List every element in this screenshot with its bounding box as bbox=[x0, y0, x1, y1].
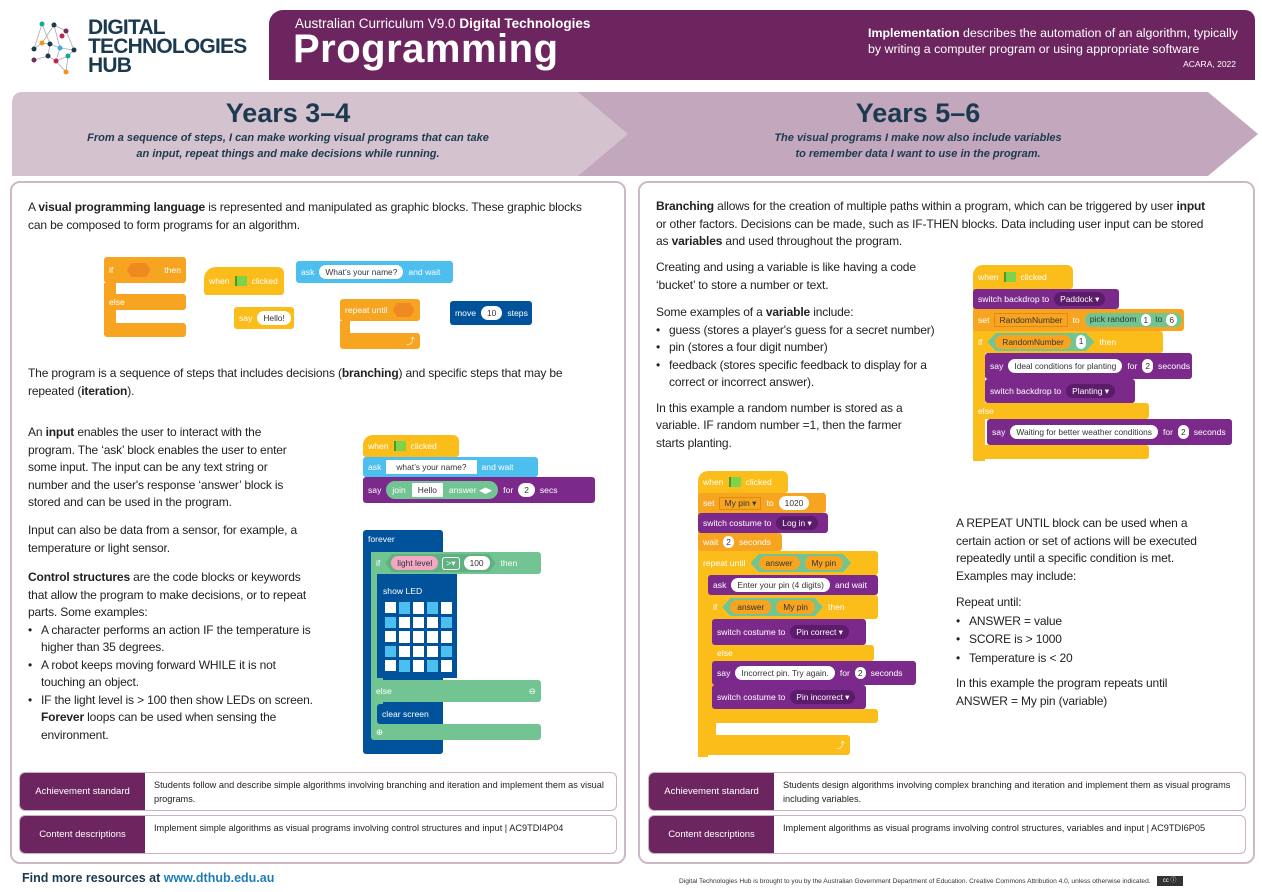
input program blocks: join answer ◀▶ bbox=[392, 484, 492, 495]
definition bbox=[868, 26, 1238, 69]
example blocks: Hello! bbox=[263, 313, 285, 323]
pin program: set to bbox=[703, 498, 774, 508]
random number program bbox=[973, 265, 1232, 461]
pin program: 1020 bbox=[785, 498, 803, 508]
random number program: RandomNumber bbox=[999, 315, 1063, 325]
years 3-4 heading: From a sequence of steps, I can make working visual programs that can take bbox=[87, 132, 489, 144]
pin program bbox=[698, 471, 916, 757]
title: Programming bbox=[293, 27, 559, 71]
pin program: My pin bbox=[783, 602, 808, 612]
random number program: 2 bbox=[1145, 361, 1150, 371]
pin program: else bbox=[717, 648, 733, 658]
panel: years 3-4 bbox=[10, 181, 626, 864]
text: variables bbox=[656, 260, 934, 450]
input program blocks bbox=[363, 435, 595, 503]
pin program: when clicked bbox=[703, 477, 772, 487]
example blocks: if then bbox=[109, 265, 181, 275]
forever program blocks: ⊕ bbox=[376, 726, 383, 736]
input program blocks: what’s your name? bbox=[396, 462, 467, 472]
random number program: say for seconds bbox=[992, 427, 1226, 437]
content descriptions 3-4 bbox=[19, 815, 617, 854]
example blocks bbox=[104, 257, 532, 349]
logo: TECHNOLOGIES bbox=[88, 35, 246, 58]
achievement standard 5-6: Achievement standard bbox=[664, 786, 759, 797]
forever program blocks: >▾ bbox=[446, 558, 456, 568]
example blocks: ask and wait bbox=[301, 267, 440, 277]
pin program: My pin ▾ bbox=[724, 498, 756, 508]
logo: HUB bbox=[88, 54, 131, 77]
years 5-6 heading bbox=[774, 98, 1062, 160]
pin program: switch costume to bbox=[703, 518, 771, 528]
random number program: else bbox=[978, 406, 994, 416]
definition: Implementation describes the automation of an algorithm, typically by writing a computer program or using appropriate software bbox=[868, 26, 1238, 56]
random number program: 1 bbox=[1144, 315, 1148, 325]
footer: credit bbox=[679, 876, 1183, 886]
pin program: answer bbox=[766, 558, 793, 568]
content descriptions 3-4: Implement simple algorithms as visual programs involving control structures and input | AC9TDI4P04 bbox=[154, 823, 563, 833]
pin program: switch costume to bbox=[717, 692, 785, 702]
text: branching iteration: The program is a sequence of steps that includes decisions (branching) and specific steps that may be repeated (iteration). bbox=[28, 366, 562, 398]
pin program: say for seconds bbox=[717, 668, 903, 678]
text: control structures bbox=[28, 570, 313, 742]
input program blocks: say for secs bbox=[368, 485, 558, 495]
example blocks: else bbox=[109, 297, 125, 307]
random number program: 1 bbox=[1079, 336, 1083, 346]
years 5-6 heading: Years 5–6 bbox=[856, 98, 980, 128]
text: repeat until: ANSWER = value bbox=[969, 614, 1062, 628]
pin program: Pin correct ▾ bbox=[796, 627, 843, 637]
example blocks: say bbox=[239, 313, 252, 323]
text: repeat until bbox=[956, 516, 1197, 708]
example blocks: 10 bbox=[487, 308, 496, 318]
random number program: 6 bbox=[1169, 315, 1174, 325]
years 5-6 heading: to remember data I want to use in the program. bbox=[795, 148, 1041, 160]
pin program: wait seconds bbox=[703, 537, 771, 547]
forever program blocks: clear screen bbox=[382, 709, 429, 719]
achievement standard 3-4: Students follow and describe simple algorithms involving branching and iteration and implement them as visual programs. bbox=[154, 780, 604, 804]
random number program: Waiting for better weather conditions bbox=[1016, 427, 1152, 437]
text: repeat until: In this example the program repeats until ANSWER = My pin (variable) bbox=[956, 676, 1167, 708]
subtitle: Australian Curriculum V9.0 Digital Technologies bbox=[295, 16, 590, 31]
years 5-6 heading: The visual programs I make now also include variables bbox=[774, 132, 1062, 144]
pin program: Log in ▾ bbox=[782, 518, 812, 528]
text: variables: pin (stores a four digit number) bbox=[669, 340, 828, 354]
header banner bbox=[269, 10, 1255, 80]
random number program: pick random to bbox=[1090, 314, 1162, 324]
input program blocks: when clicked bbox=[368, 441, 437, 451]
random number program: Ideal conditions for planting bbox=[1014, 361, 1116, 371]
pin program: Enter your pin (4 digits) bbox=[737, 580, 824, 590]
forever program blocks: ⊖ bbox=[529, 686, 536, 696]
random number program: Paddock ▾ bbox=[1060, 294, 1099, 304]
example blocks: repeat until bbox=[345, 305, 388, 315]
text: variables: guess (stores a player's guess for a secret number) bbox=[669, 322, 934, 336]
input program blocks: ask and wait bbox=[368, 462, 514, 472]
text: branching: Branching allows for the creation of multiple paths within a program, which can be triggered by user input or other factors. Decisions can be made, such as IF-THEN blocks. Data including user input can be stored as variables and used throughout the program. bbox=[656, 199, 1205, 248]
panel: years 5-6 bbox=[638, 181, 1255, 864]
text: control structures: A robot keeps moving forward WHILE it is not touching an object. bbox=[41, 658, 276, 689]
text: control structures: IF the light level is > 100 then show LEDs on screen. Forever loops can be used when sensing the environment. bbox=[41, 692, 313, 742]
pin program: My pin bbox=[812, 558, 836, 568]
content descriptions 3-4: Content descriptions bbox=[39, 829, 126, 840]
text: repeat until: Repeat until: bbox=[956, 595, 1021, 609]
text: variables: feedback (stores specific feedback to display for a correct or incorrect answer). bbox=[669, 358, 927, 389]
years banner bbox=[12, 92, 1258, 176]
forever program blocks bbox=[363, 530, 541, 754]
random number program: set to bbox=[978, 315, 1080, 325]
achievement standard 5-6: Students design algorithms involving complex branching and iteration and implement them as visual programs including variables. bbox=[783, 780, 1230, 804]
years 3-4 heading: an input, repeat things and make decisions while running. bbox=[136, 148, 440, 160]
text: variables: Some examples of a variable include: bbox=[656, 305, 853, 319]
example blocks: What’s your name? bbox=[325, 267, 397, 277]
logo: DIGITAL bbox=[88, 16, 165, 39]
achievement standard 3-4: Achievement standard bbox=[35, 786, 130, 797]
footer: credit: Digital Technologies Hub is brought to you by the Australian Government Department of Education. Creative Commons Attribution 4.0, unless otherwise indicated. bbox=[679, 878, 1151, 884]
random number program: switch backdrop to bbox=[990, 386, 1061, 396]
text: repeat until: A REPEAT UNTIL block can be used when a certain action or set of actions will be executed repeatedly until a specific condition is met. Examples may include: bbox=[956, 516, 1197, 582]
random number program: RandomNumber bbox=[1002, 337, 1064, 347]
random number program: when clicked bbox=[978, 272, 1047, 282]
achievement standard 3-4 bbox=[19, 772, 617, 811]
pin program: if then bbox=[713, 602, 845, 612]
text: repeat until: Temperature is < 20 bbox=[969, 650, 1073, 664]
input program blocks: Hello bbox=[418, 485, 437, 495]
footer: resources link: Find more resources at www.dthub.edu.au bbox=[22, 871, 274, 885]
pin program: Pin incorrect ▾ bbox=[796, 692, 849, 702]
forever program blocks: else bbox=[376, 686, 392, 696]
content descriptions 5-6 bbox=[648, 815, 1246, 854]
pin program: switch costume to bbox=[717, 627, 785, 637]
forever program blocks: 100 bbox=[470, 558, 484, 568]
forever program blocks: forever bbox=[368, 534, 395, 544]
text: input: An input enables the user to interact with the program. The ‘ask’ block enables the user to enter some input. The input can be any text string or number and the user's response ‘answer’ block is stored and can be used in the program. bbox=[28, 425, 287, 509]
pin program: answer bbox=[737, 602, 764, 612]
forever program blocks: light level bbox=[397, 558, 432, 568]
pin program: 2 bbox=[726, 537, 731, 547]
random number program: 2 bbox=[1181, 427, 1186, 437]
text: control structures: Control structures are the code blocks or keywords that allow the program to make decisions, or to repeat parts. Some examples: bbox=[28, 570, 306, 619]
pin program: ask and wait bbox=[713, 580, 867, 590]
years 3-4 heading: Years 3–4 bbox=[226, 98, 350, 128]
logo bbox=[32, 16, 246, 77]
pin program: 2 bbox=[858, 668, 863, 678]
text: variables: Creating and using a variable is like having a code ‘bucket’ to store a number or text. bbox=[656, 260, 916, 292]
pin program: repeat until bbox=[703, 558, 746, 568]
definition: ACARA, 2022 bbox=[1183, 59, 1236, 69]
footer: credit: cc ⓘ bbox=[1163, 878, 1176, 884]
text: visual programming: A visual programming language is represented and manipulated as graphic blocks. These graphic blocks can be composed to form programs for an algorithm. bbox=[28, 200, 582, 232]
random number program: switch backdrop to bbox=[978, 294, 1049, 304]
example blocks: move steps bbox=[455, 308, 528, 318]
achievement standard 5-6 bbox=[648, 772, 1246, 811]
example blocks: when clicked bbox=[209, 276, 278, 286]
pin program: ⤴ bbox=[836, 740, 845, 750]
text: repeat until: SCORE is > 1000 bbox=[969, 632, 1062, 646]
random number program: if then bbox=[978, 337, 1116, 347]
text: variables: In this example a random number is stored as a variable. IF random number =1, then the farmer starts planting. bbox=[656, 400, 903, 450]
input program blocks: 2 bbox=[524, 485, 529, 495]
example blocks: ⤴ bbox=[406, 336, 415, 346]
text: input sensor: Input can also be data from a sensor, for example, a temperature or light sensor. bbox=[28, 523, 297, 554]
random number program: say for seconds bbox=[990, 361, 1190, 371]
content descriptions 5-6: Implement algorithms as visual programs involving control structures, variables and input | AC9TDI6P05 bbox=[783, 823, 1205, 833]
content descriptions 5-6: Content descriptions bbox=[668, 829, 755, 840]
text: control structures: A character performs an action IF the temperature is higher than 35 degrees. bbox=[41, 622, 311, 654]
pin program: Incorrect pin. Try again. bbox=[741, 668, 829, 678]
years 3-4 heading bbox=[87, 98, 489, 160]
forever program blocks: if then bbox=[376, 558, 517, 568]
forever program blocks: show LED bbox=[383, 586, 422, 596]
random number program: Planting ▾ bbox=[1072, 386, 1109, 396]
